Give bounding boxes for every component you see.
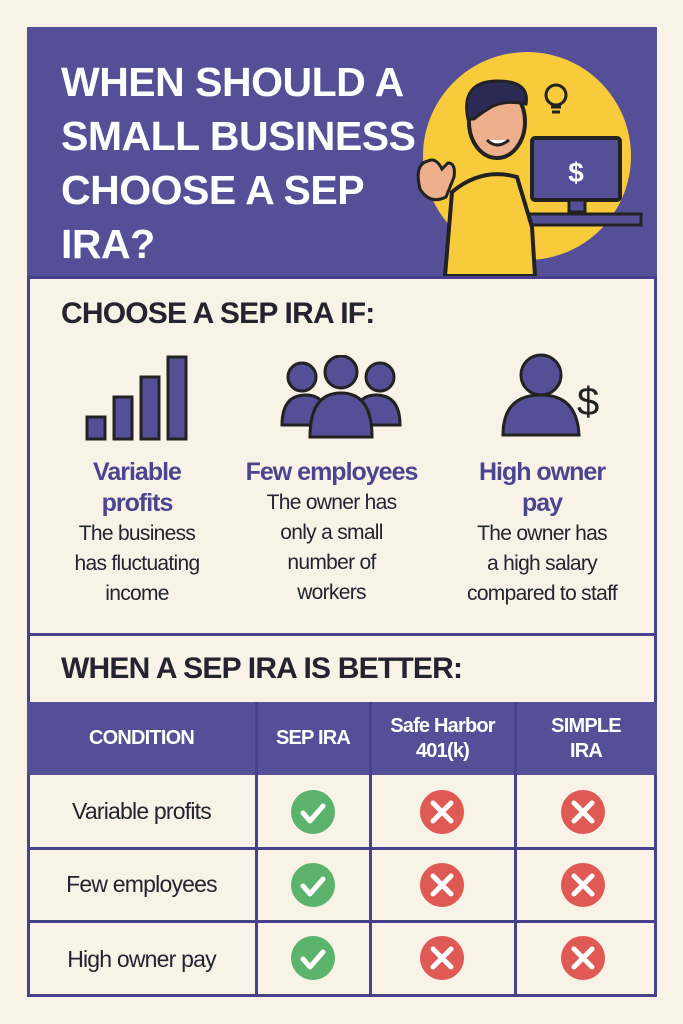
column: few employees: number of xyxy=(287,551,376,574)
column: variable profits xyxy=(75,458,199,605)
monitor xyxy=(532,138,620,200)
column: high owner pay: The owner has xyxy=(477,522,607,545)
column: high owner pay xyxy=(467,458,618,605)
column: variable profits: has fluctuating xyxy=(75,552,199,575)
bulb xyxy=(546,85,566,112)
column: few employees: only a small xyxy=(280,521,383,544)
column: few employees: The owner has xyxy=(267,491,396,514)
head xyxy=(469,86,525,158)
comparison table: SIMPLE xyxy=(551,714,621,736)
heading: CHOOSE A SEP IRA IF: xyxy=(61,297,374,330)
comparison table: CONDITION xyxy=(89,727,194,749)
comparison table: High owner pay xyxy=(67,946,216,972)
header band xyxy=(27,27,657,276)
column: variable profits: Variable xyxy=(93,458,181,486)
column: few employees: workers xyxy=(297,581,366,604)
column: few employees: Few employees xyxy=(246,458,417,486)
title: WHEN SHOULD A SMALL BUSINESS CHOOSE A SEP IRA? xyxy=(61,59,415,267)
column: variable profits: profits xyxy=(102,489,172,517)
column: variable profits: income xyxy=(105,582,169,605)
column: few employees xyxy=(246,458,418,604)
hand xyxy=(418,160,454,200)
comparison table: Safe Harbor xyxy=(390,714,495,736)
column: variable profits: The business xyxy=(79,522,195,545)
icon: person with dollar xyxy=(502,354,599,436)
icon: bar chart xyxy=(86,356,188,440)
column: high owner pay: pay xyxy=(522,489,562,517)
status icons xyxy=(291,790,605,980)
comparison table: SEP IRA xyxy=(276,727,350,749)
column: high owner pay: High owner xyxy=(479,458,605,486)
body xyxy=(445,174,535,276)
icon: group xyxy=(280,355,402,438)
column: high owner pay: a high salary xyxy=(487,552,597,575)
comparison table xyxy=(27,702,657,994)
heading: when a SEP IRA is better: WHEN A SEP IRA IS BETTER: xyxy=(61,652,462,685)
section: choose a SEP IRA if xyxy=(27,276,657,636)
icon: person with dollar: $ xyxy=(577,380,599,424)
column: high owner pay: compared to staff xyxy=(467,582,617,605)
illustration: person at computer xyxy=(416,52,642,276)
comparison table: 401(k) xyxy=(416,740,469,762)
comparison table: IRA xyxy=(570,740,602,762)
comparison table: Few employees xyxy=(66,871,217,897)
grid lines xyxy=(255,702,258,997)
illustration: person at computer: $ xyxy=(568,157,584,188)
row labels: Variable profits xyxy=(72,798,211,824)
table header xyxy=(27,702,657,775)
